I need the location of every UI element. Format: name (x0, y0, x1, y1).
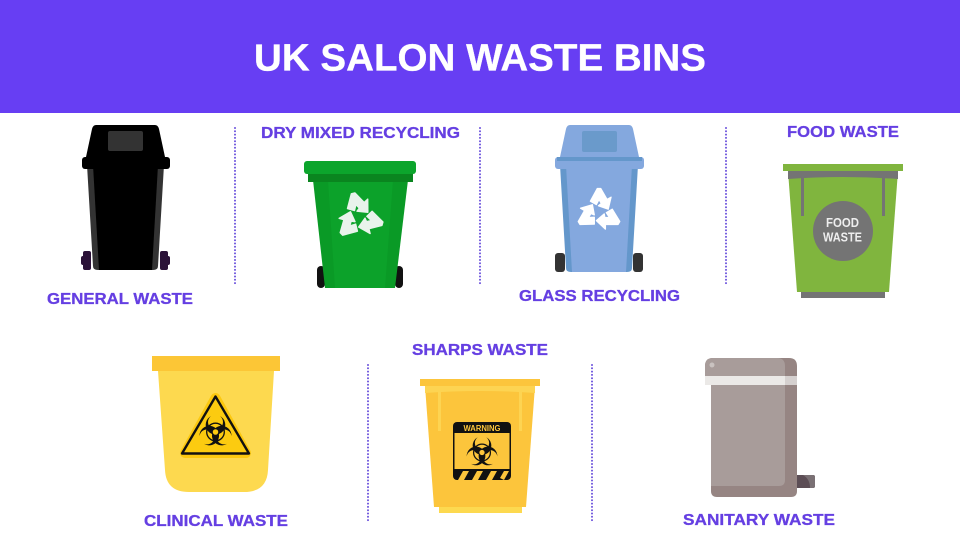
label: dry mixed recycling: DRY MIXED RECYCLING (261, 125, 460, 142)
icon: yellow sharps bin (420, 379, 540, 513)
icon: general waste black bin (81, 125, 170, 270)
label: clinical waste: CLINICAL WASTE (144, 513, 288, 530)
label: sanitary waste: SANITARY WASTE (683, 512, 835, 529)
bin label text: FOOD (826, 215, 859, 230)
icon: yellow clinical waste bin (152, 356, 280, 492)
label: glass recycling: GLASS RECYCLING (519, 288, 680, 305)
icon: blue glass recycling bin (555, 125, 644, 272)
icon: recycling symbol (326, 187, 390, 246)
icon: green food waste bin (783, 164, 903, 298)
bin label text: WASTE (823, 230, 862, 244)
label: general waste: GENERAL WASTE (47, 291, 193, 308)
title: UK SALON WASTE BINS (254, 38, 706, 80)
icon: green recycling bin (304, 161, 416, 288)
icon: recycling symbol (573, 188, 623, 233)
icon: grey sanitary bin (705, 358, 815, 497)
warning label: WARNING (464, 424, 500, 433)
header banner (0, 0, 960, 113)
label: food waste: FOOD WASTE (787, 124, 899, 141)
icon: biohazard warning triangle (182, 396, 249, 454)
label: sharps waste: SHARPS WASTE (412, 342, 548, 359)
